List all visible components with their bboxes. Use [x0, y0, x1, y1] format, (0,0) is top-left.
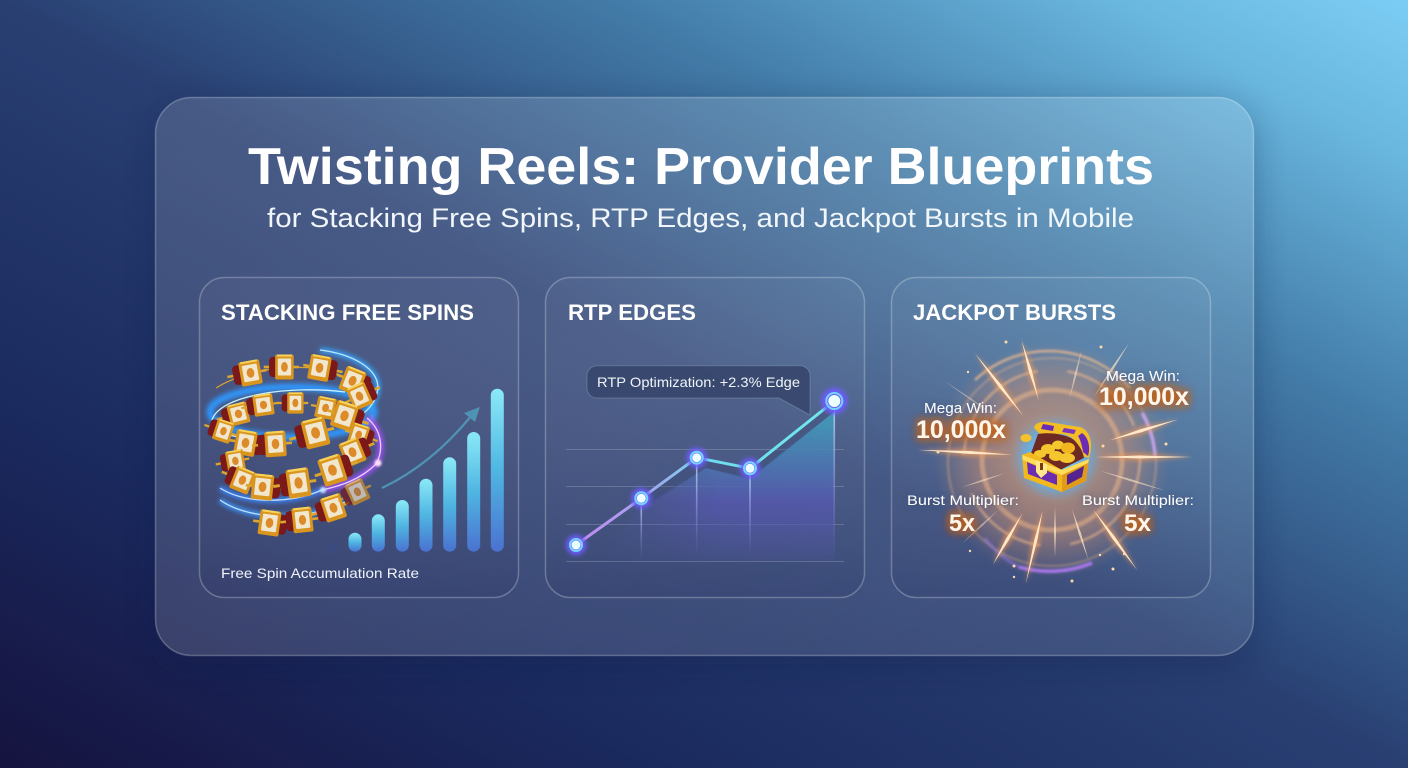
- card background: [892, 278, 1210, 598]
- bar chart: free spin growth: [328, 389, 504, 552]
- subtitle: for Stacking Free Spins, RTP Edges, and Jackpot Bursts in Mobile: [267, 203, 1134, 233]
- callout: mega win left: 10,000x: [916, 416, 1006, 444]
- panel: main glass card: [155, 98, 1254, 664]
- callout: burst multiplier left: Burst Multiplier:: [907, 492, 1019, 508]
- callout: burst multiplier right: 5x: [1124, 510, 1152, 537]
- slot reels: [201, 353, 385, 539]
- callout: mega win right: [1099, 368, 1189, 411]
- title: Twisting Reels: Provider Blueprints: [248, 138, 1154, 196]
- light rays glow: [918, 340, 1192, 585]
- line chart: rtp optimization: [566, 388, 847, 562]
- icon: treasure chest: [1012, 416, 1100, 500]
- gold chain: [216, 367, 353, 388]
- panel: rtp edges: [546, 278, 864, 598]
- card background: [546, 278, 864, 598]
- chest body: [1022, 452, 1089, 492]
- glowing rings: [948, 351, 1156, 571]
- callout: burst multiplier left: [907, 492, 1019, 537]
- callout: mega win left: Mega Win:: [924, 400, 997, 417]
- panel: jackpot bursts: [892, 278, 1210, 598]
- data points: [566, 388, 847, 555]
- callout: burst multiplier left: 5x: [949, 510, 976, 537]
- caption: accumulation rate: Free Spin Accumulation Rate: [221, 565, 419, 581]
- light rays: [918, 340, 1192, 584]
- heading: rtp edges: RTP EDGES: [568, 300, 696, 325]
- icon: spiral of slot reels: [201, 350, 385, 539]
- energy ribbons glow: [210, 350, 381, 516]
- icon: radial burst: [918, 340, 1192, 585]
- callout: mega win right: 10,000x: [1099, 383, 1189, 411]
- energy ribbons core: [212, 350, 381, 516]
- callout: rtp optimization: RTP Optimization: +2.3% Edge: [597, 374, 800, 390]
- arrow: growth trend: [382, 407, 480, 488]
- coins: [1034, 440, 1075, 463]
- chest lid: [1034, 422, 1091, 458]
- heading: stacking free spins: STACKING FREE SPINS: [221, 300, 474, 325]
- callout: burst multiplier right: Burst Multiplier:: [1082, 492, 1194, 508]
- callout: rtp optimization: [587, 366, 810, 415]
- sparkles: [936, 340, 1168, 582]
- heading: jackpot bursts: JACKPOT BURSTS: [913, 300, 1116, 325]
- panel: stacking free spins: [200, 278, 518, 598]
- callout: mega win left: [916, 400, 1006, 444]
- card background: [200, 278, 518, 598]
- callout: mega win right: Mega Win:: [1106, 368, 1180, 385]
- callout: burst multiplier right: [1082, 492, 1194, 537]
